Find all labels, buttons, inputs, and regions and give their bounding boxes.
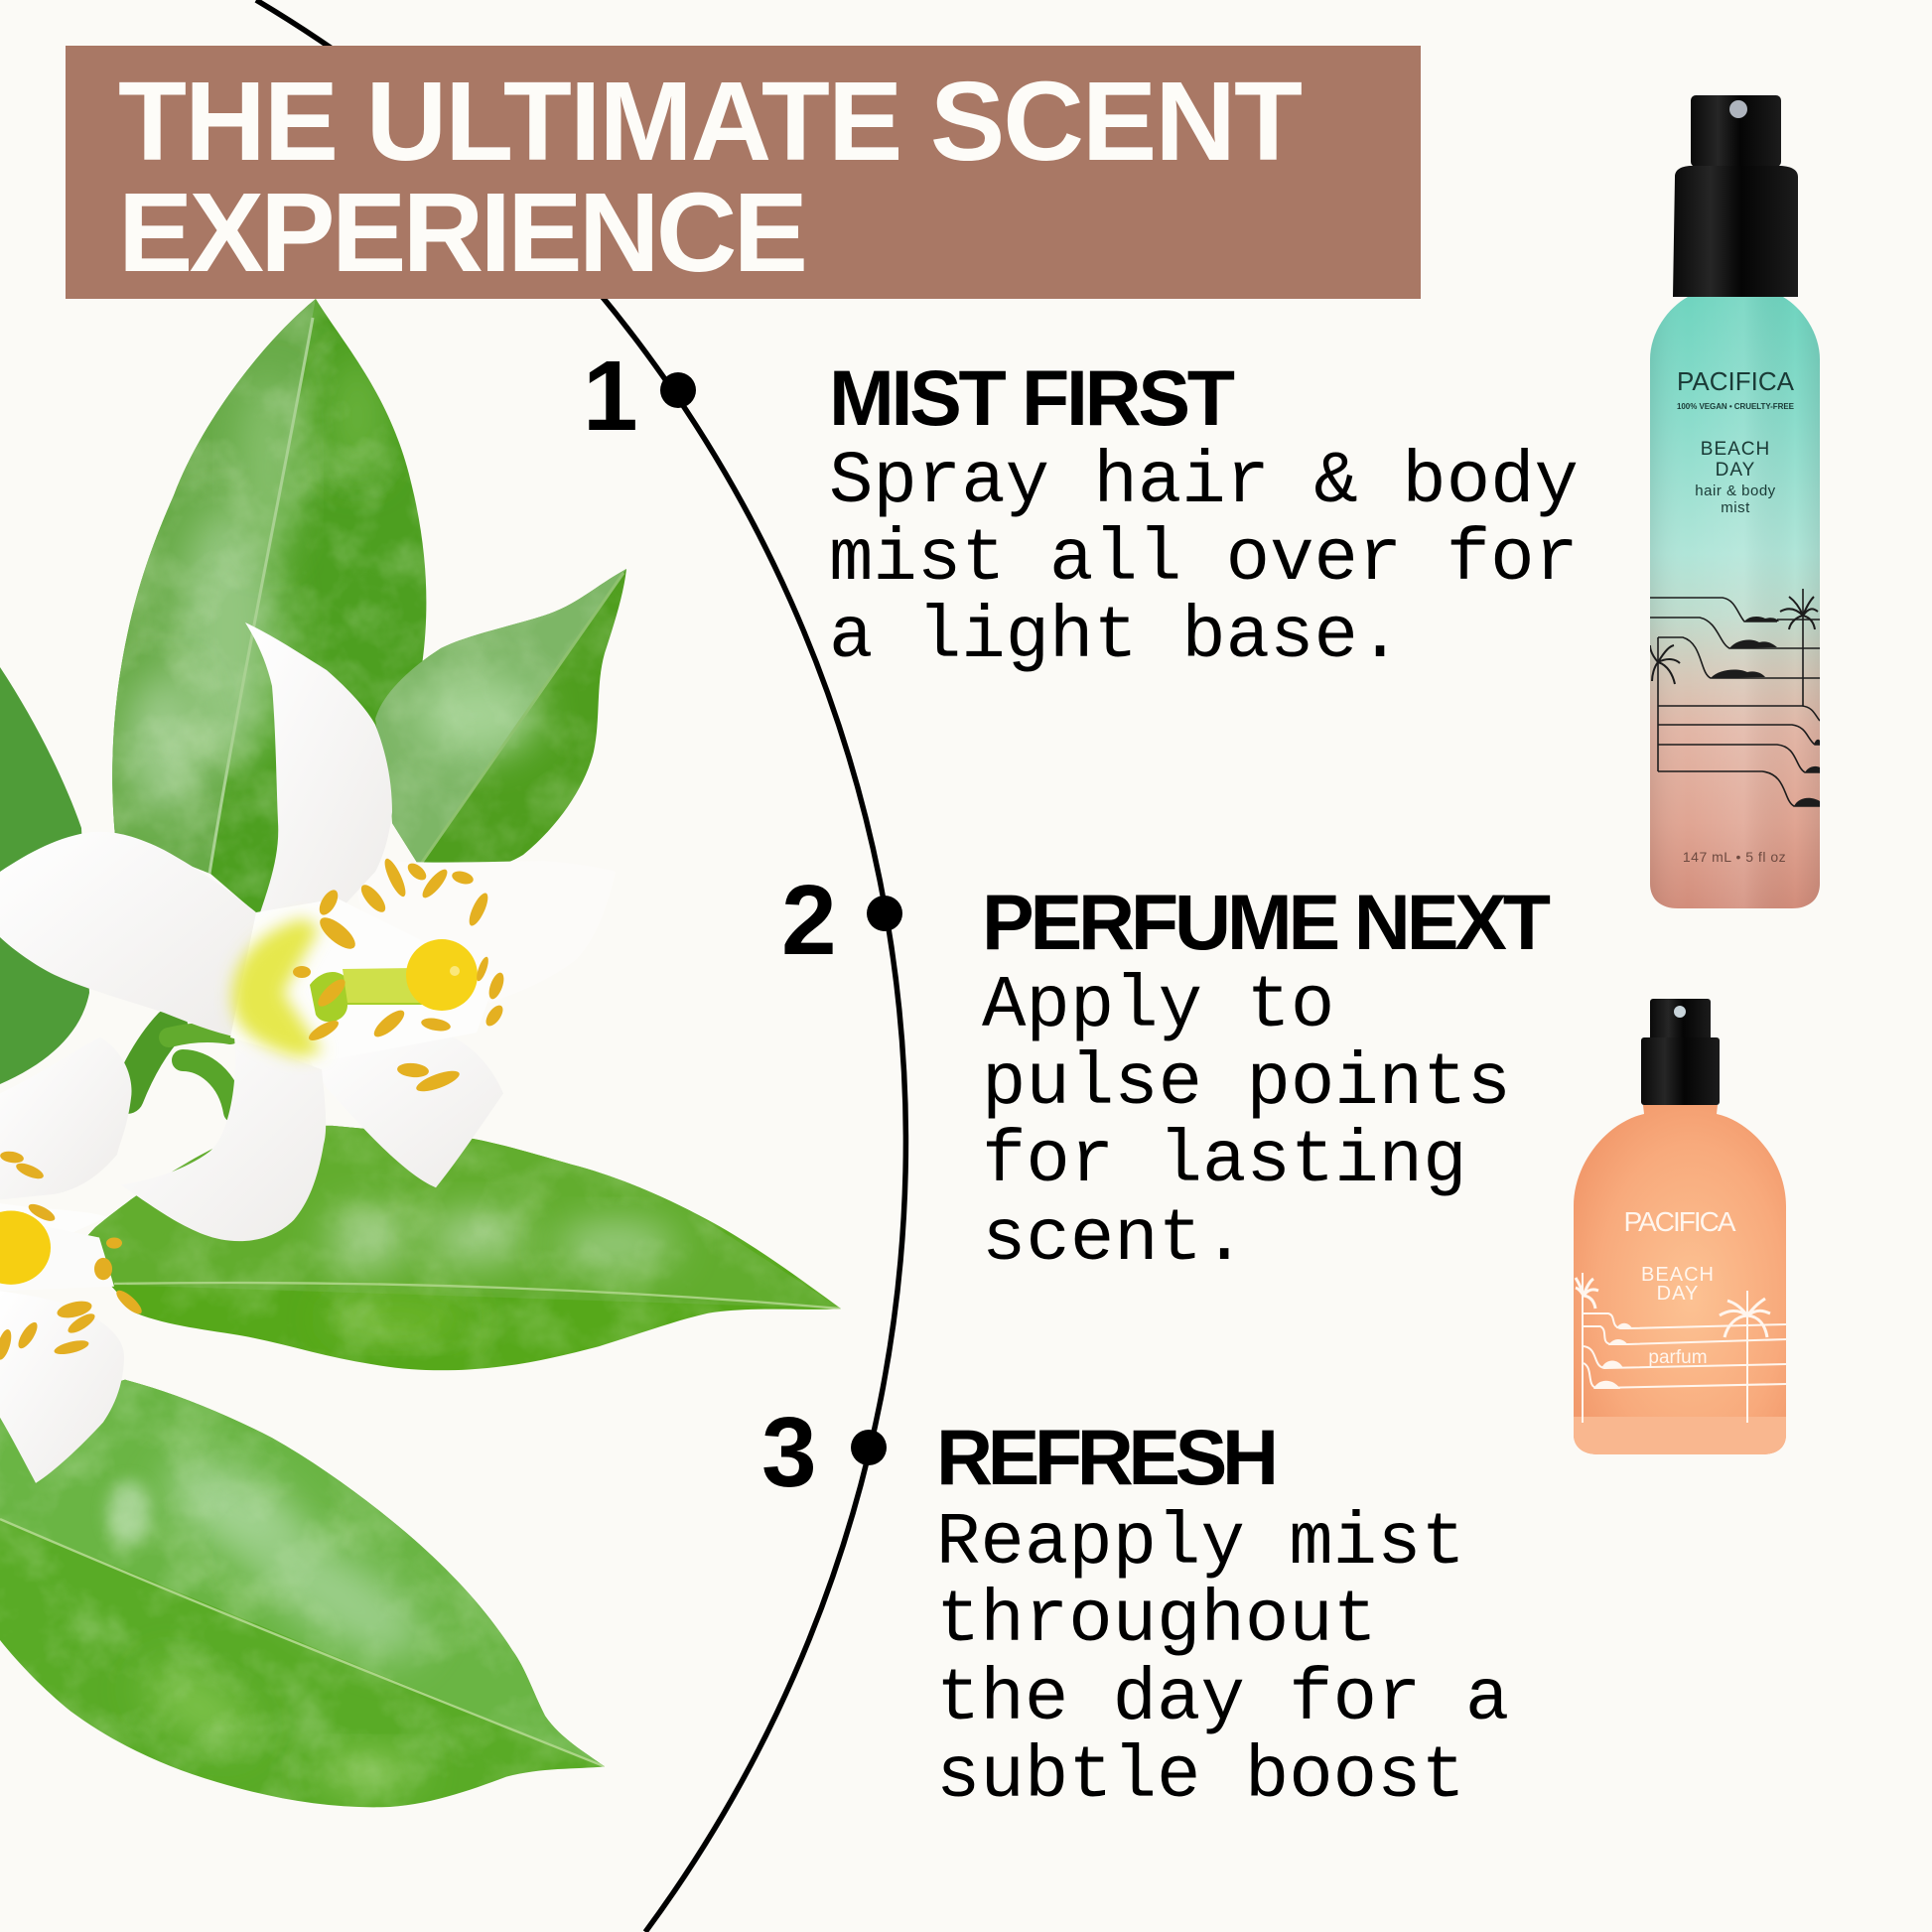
bottle base <box>1574 1417 1786 1454</box>
body: refresh: subtle boost <box>936 1735 1465 1819</box>
landscape line art <box>1576 1273 1787 1423</box>
body: mist first: a light base. <box>829 596 1402 679</box>
step marker 1 <box>660 372 696 408</box>
bottle label text: PACIFICA <box>1624 1206 1736 1237</box>
bottle label text <box>1677 366 1795 865</box>
illustration: orange blossom branch with leaves <box>0 288 854 1818</box>
body: refresh: throughout <box>936 1580 1377 1663</box>
bottle label text: BEACH <box>1641 1264 1715 1286</box>
heading: mist first: MIST FIRST <box>829 353 1235 442</box>
body: perfume next: Apply to <box>982 965 1334 1048</box>
step 3 <box>761 1397 1509 1819</box>
ovary and style <box>310 968 422 1022</box>
pistil: lower left flower <box>0 1210 51 1285</box>
bottle label text: mist <box>1721 499 1750 516</box>
body: mist first: mist all over for <box>829 518 1579 602</box>
step marker 2 <box>867 896 902 931</box>
bottle label text <box>1624 1206 1736 1368</box>
petal: right faint <box>357 861 616 1003</box>
step number 3: 3 <box>761 1397 817 1508</box>
flower: lower left <box>0 1037 145 1483</box>
heading: perfume next: PERFUME NEXT <box>982 878 1551 966</box>
stems <box>127 1025 234 1112</box>
step 2 <box>781 865 1551 1282</box>
leaf: main upper <box>112 299 427 913</box>
petal: top <box>245 622 392 923</box>
flower throat <box>232 918 323 1057</box>
leaf: small right <box>375 569 626 863</box>
pistil <box>406 939 478 1011</box>
petal: lower right <box>298 1033 503 1187</box>
body: perfume next: scent. <box>982 1198 1246 1282</box>
body: perfume next <box>982 965 1511 1282</box>
landscape line art <box>1650 589 1820 806</box>
leaf: large horizontal <box>87 1126 841 1370</box>
petal: centre fill <box>230 898 496 1062</box>
body: mist first <box>829 441 1579 679</box>
bottle label text: parfum <box>1648 1347 1708 1368</box>
flower: main blossom <box>0 622 616 1241</box>
stamens: lower left flower <box>0 1150 145 1361</box>
step 1 <box>583 341 1579 679</box>
title banner <box>66 46 1421 299</box>
petal: left <box>0 832 256 1037</box>
leaf: far left <box>0 667 89 1084</box>
sprayer cap <box>1673 95 1798 297</box>
body: perfume next: for lasting <box>982 1120 1466 1203</box>
stamens <box>293 856 506 1095</box>
bottle label text: DAY <box>1657 1283 1699 1305</box>
bottle label text: DAY <box>1716 460 1755 481</box>
heading: refresh: REFRESH <box>936 1413 1279 1501</box>
bottle label text: BEACH <box>1701 439 1770 460</box>
landscape hills <box>1711 617 1820 806</box>
product: parfum bottle <box>1574 999 1787 1454</box>
bottle label text: 100% VEGAN • CRUELTY-FREE <box>1677 402 1795 411</box>
sprayer cap <box>1641 999 1720 1105</box>
body: refresh: the day for a <box>936 1658 1509 1741</box>
petal: lower curling <box>121 1037 326 1241</box>
step number 1: 1 <box>583 341 638 452</box>
bottle label text: hair & body <box>1695 483 1776 499</box>
timeline arc <box>256 0 905 1932</box>
bottle glass <box>1574 1105 1786 1454</box>
body: refresh <box>936 1502 1509 1819</box>
step number 2: 2 <box>781 865 837 976</box>
body: refresh: Reapply mist <box>936 1502 1465 1586</box>
bottle label text: PACIFICA <box>1677 366 1795 396</box>
title banner: EXPERIENCE <box>118 170 808 295</box>
bottle body <box>1650 297 1821 908</box>
step marker 3 <box>851 1430 887 1465</box>
landscape clouds <box>1593 1323 1632 1389</box>
product: hair and body mist bottle <box>1650 95 1821 908</box>
leaf: large bottom <box>0 1365 616 1818</box>
body: perfume next: pulse points <box>982 1042 1511 1126</box>
bottle label text: 147 mL • 5 fl oz <box>1683 849 1786 865</box>
body: mist first: Spray hair & body <box>829 441 1579 524</box>
title: THE ULTIMATE SCENT <box>118 59 1303 184</box>
